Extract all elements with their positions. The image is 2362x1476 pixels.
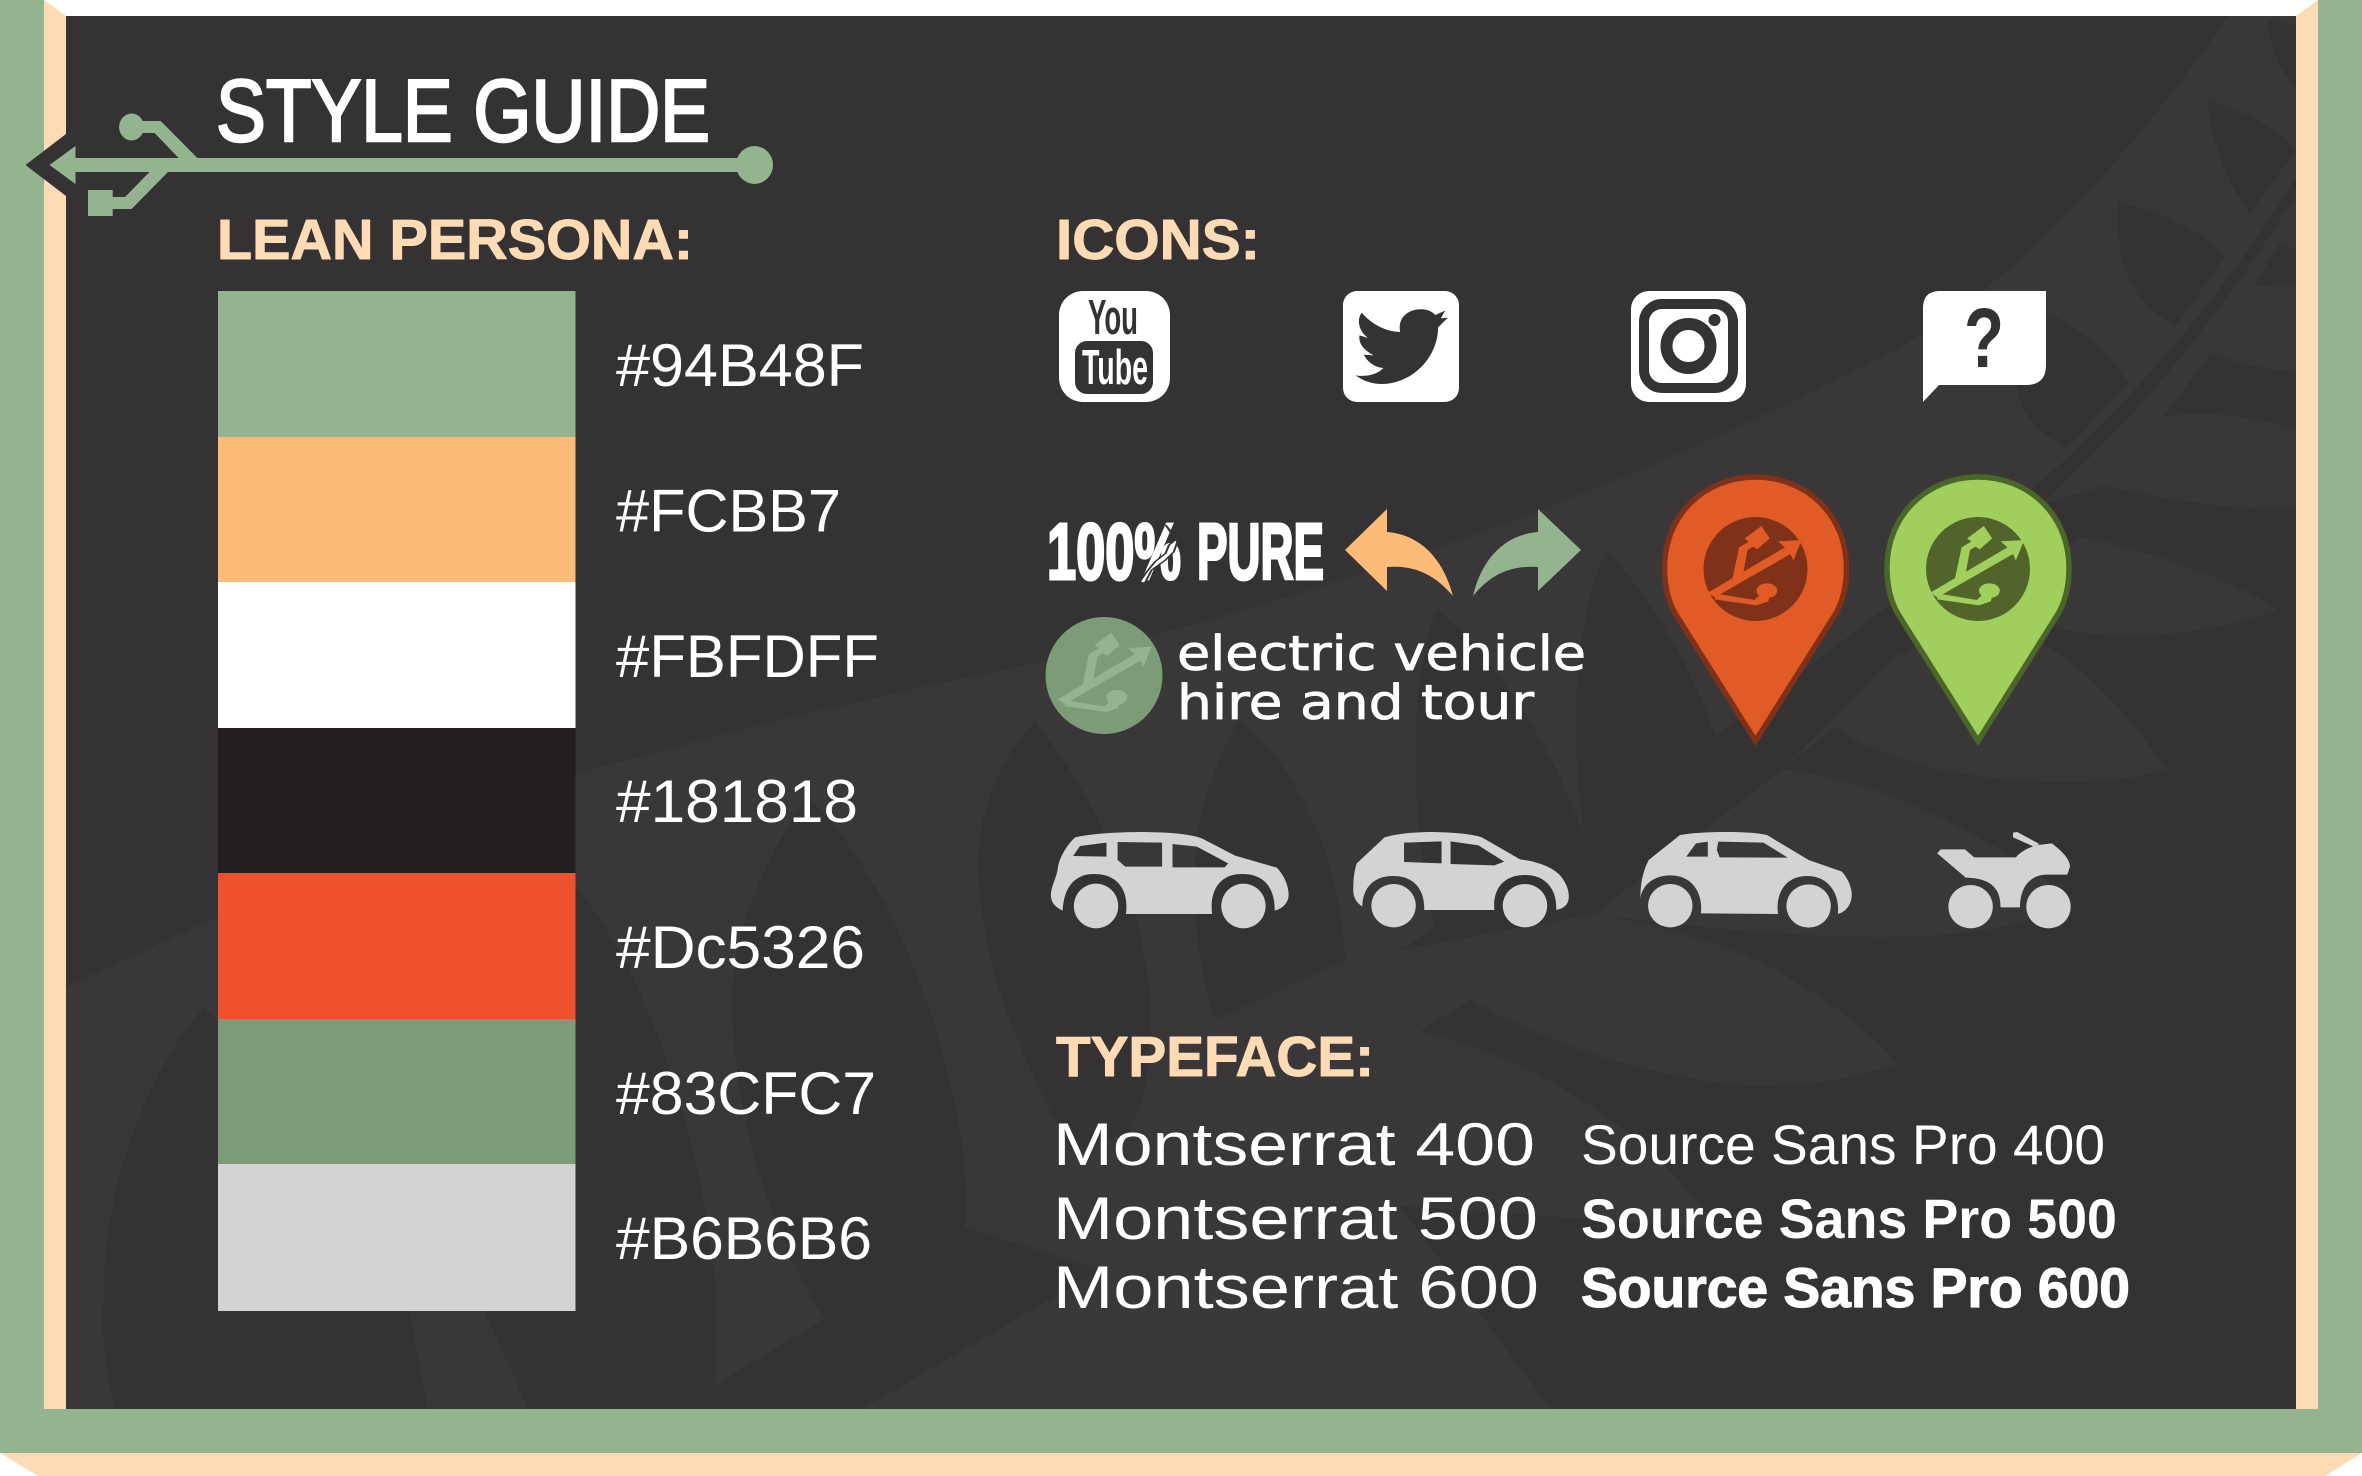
heading: typeface: TYPEFACE: <box>1056 1025 1374 1089</box>
hex labels: #181818 <box>616 768 858 835</box>
icon: youtube: You <box>1088 291 1138 345</box>
hex labels: #FBFDFF <box>616 623 879 690</box>
brand logo: electric vehicle <box>1177 626 1586 682</box>
hex labels: #B6B6B6 <box>616 1205 872 1272</box>
brand logo: hire and tour <box>1177 675 1534 731</box>
icon: twitter <box>1343 291 1459 402</box>
hex labels <box>616 332 879 1272</box>
typeface samples: source sans pro: Source Sans Pro 400 <box>1581 1113 2105 1176</box>
colour swatches <box>218 291 576 1311</box>
header usb rule <box>26 114 773 216</box>
100% pure logo: 100% <box>1047 507 1181 596</box>
100% pure logo: PURE <box>1197 507 1324 596</box>
hex labels: #Dc5326 <box>616 914 865 981</box>
map pin: green <box>1887 477 2069 741</box>
typeface samples: source sans pro <box>1581 1113 2130 1319</box>
hex labels: #83CFC7 <box>616 1060 876 1127</box>
hex labels: #94B48F <box>616 332 864 399</box>
heading: icons: ICONS: <box>1056 208 1260 272</box>
icon: youtube <box>1059 291 1170 402</box>
arrow: forward <box>1473 509 1581 596</box>
heading: lean persona: LEAN PERSONA: <box>217 208 693 272</box>
title: STYLE GUIDE <box>216 61 710 160</box>
typeface samples: source sans pro: Source Sans Pro 600 <box>1581 1256 2130 1319</box>
typeface samples: montserrat: Montserrat 400 <box>1053 1111 1535 1178</box>
arrow: back <box>1345 509 1453 596</box>
icon: vehicle 3 <box>1640 832 1852 928</box>
icon: quad bike <box>1937 832 2071 928</box>
icon: question bubble <box>1923 291 2046 402</box>
typeface samples: montserrat: Montserrat 600 <box>1053 1254 1539 1321</box>
icon: vehicle 1 <box>1051 832 1289 928</box>
icon: youtube: Tube <box>1082 341 1148 395</box>
icon: instagram <box>1631 291 1746 402</box>
brand logo <box>1046 617 1586 734</box>
map pin: orange <box>1664 477 1846 741</box>
typeface samples: montserrat: Montserrat 500 <box>1053 1185 1538 1252</box>
icon: question bubble: ? <box>1964 291 2004 385</box>
typeface samples: source sans pro: Source Sans Pro 500 <box>1581 1187 2117 1250</box>
icon: vehicle 2 <box>1353 832 1569 927</box>
typeface samples: montserrat <box>1053 1111 1539 1321</box>
hex labels: #FCBB7 <box>616 478 841 544</box>
